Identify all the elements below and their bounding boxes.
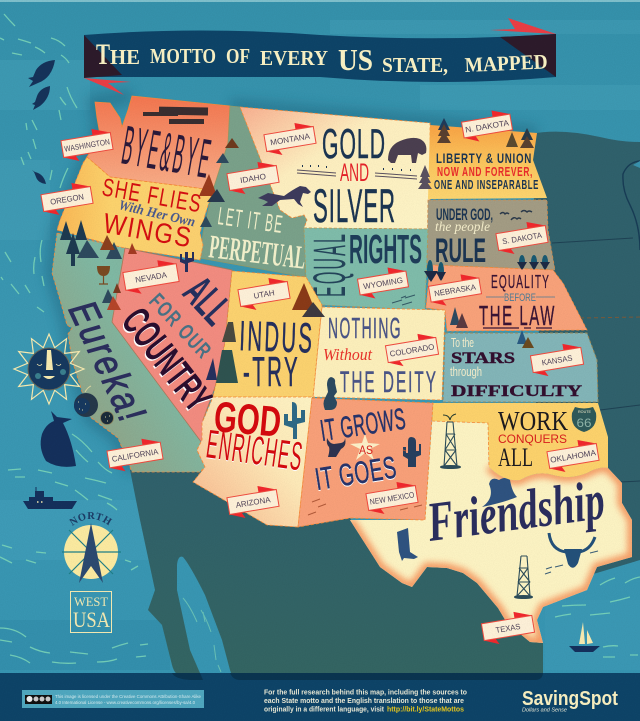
icon: buffalo: [388, 138, 426, 163]
title text: HE: [110, 45, 140, 69]
label: Utah: UTAH: [253, 288, 275, 301]
motto: She flies with her own wings: With Her Own: [117, 198, 197, 230]
motto: God enriches: [204, 393, 306, 480]
motto: Equality before the law: [479, 272, 556, 331]
label: Nevada: [122, 257, 180, 296]
motto: Gold and silver: [297, 120, 417, 232]
licence box: This image is licensed under the Creative Commons Attribution-Share Alike: [55, 694, 201, 700]
motto: Industry: -TRY: [243, 348, 300, 395]
icon: horse: [258, 186, 311, 207]
motto: She flies with her own wings: SHE FLIES: [100, 173, 204, 218]
motto: Gold and silver: GOLD: [322, 120, 386, 167]
infographic: PERPETUAL: [207, 229, 308, 277]
label: Oregon: OREGON: [50, 192, 85, 207]
motto: She flies with her own wings: [100, 173, 204, 254]
motto: Work conquers all: ALL: [498, 443, 533, 472]
motto: Equality before the law: EQUALITY: [491, 272, 550, 292]
infographic: BYE&BYE: [118, 114, 217, 190]
motto: It grows as it goes: IT GROWS: [318, 403, 408, 448]
motto: Liberty and union: [434, 150, 539, 192]
label: Wyoming: WYOMING: [363, 276, 404, 291]
motto: All for our country: COUNTRY: [113, 300, 220, 420]
label: Montana: MONTANA: [270, 132, 311, 147]
icon: trees Nebraska border: [427, 255, 548, 280]
icon: mountains Utah: [292, 283, 325, 317]
icon: compass: [62, 512, 121, 583]
motto: It grows as it goes: IT GOES: [313, 450, 399, 497]
icon: mountains Oregon and California: [77, 235, 137, 310]
motto: To the stars through difficulty: STARS: [451, 350, 515, 367]
motto: Nothing without the deity: NOTHING: [328, 313, 402, 345]
logo: SavingSpot: Dollars and Sense: [522, 708, 567, 714]
icon: sun: [14, 334, 84, 404]
panel: Nebraska: [426, 265, 587, 331]
licence box: [22, 690, 204, 708]
motto: To the stars through difficulty: through: [450, 364, 482, 379]
icon: mountains Idaho: [199, 138, 239, 227]
label: Kansas: [529, 341, 585, 379]
panel: Utah: INDUS: [239, 312, 315, 362]
icon: cowboy boot: [397, 528, 418, 561]
motto: To the stars through difficulty: To the: [451, 335, 474, 350]
title text: US: [338, 42, 373, 77]
infographic: ENRICHES: [204, 422, 306, 479]
panel: Kansas: [443, 333, 598, 402]
label: Oklahoma: [546, 437, 600, 474]
title text: T: [96, 38, 110, 71]
panel: South Dakota: [427, 200, 555, 270]
label: North Dakota: [460, 108, 513, 144]
research note: each State motto and the English translation to those that are: [264, 696, 465, 705]
motto: Under God the people rule: RULE: [435, 232, 486, 270]
label: Nebraska: [427, 271, 482, 308]
title text: MOTTO: [150, 44, 216, 68]
panel: Arizona: [193, 393, 312, 527]
label: California: [106, 436, 164, 474]
landmass: eastern United States: [530, 132, 640, 575]
motto: Equality before the law: BEFORE: [504, 292, 536, 304]
stamp: West USA: WEST: [74, 594, 108, 609]
icon: oil derrick: [514, 556, 532, 598]
infographic: ENRICHES: [204, 423, 306, 480]
landmass: Mexico: [130, 470, 543, 680]
motto: Nothing without the deity: Without: [323, 345, 373, 364]
panel: Wyoming: RIGHTS: [349, 226, 422, 272]
panel: New Mexico: [298, 398, 433, 527]
banner: title: [84, 18, 556, 95]
label: Montana: [263, 120, 317, 157]
motto: Let it be perpetual: [207, 202, 308, 277]
labels: state ribbons: [40, 108, 600, 647]
label: Idaho: IDAHO: [240, 172, 267, 185]
motto: It grows as it goes: [313, 403, 408, 498]
stamp: West USA: [70, 592, 112, 632]
label: California: CALIFORNIA: [111, 447, 160, 464]
motto: Under God the people rule: [435, 205, 493, 270]
panel: Washington: [87, 96, 230, 190]
label: Nevada: NEVADA: [135, 270, 168, 285]
label: Colorado: COLORADO: [389, 342, 435, 359]
motto: God enriches: GOD: [212, 393, 283, 447]
motto: Liberty and union: NOW AND FOREVER,: [437, 164, 533, 179]
label: South Dakota: [495, 219, 549, 256]
motto: Industry: [239, 312, 315, 395]
licence box: 4.0 International License - www.creativecommons.org/licenses/by-sa/4.0: [55, 700, 195, 706]
research note: http://bit.ly/StateMottos: [387, 704, 464, 714]
label: Texas: TEXAS: [495, 622, 521, 635]
label: Wyoming: [356, 265, 409, 301]
stamp: West USA: USA: [73, 607, 110, 632]
motto: Gold and silver: SILVER: [313, 179, 396, 232]
motto: She flies with her own wings: WINGS: [101, 207, 195, 254]
label: New Mexico: NEW MEXICO: [369, 490, 415, 507]
motto: To the stars through difficulty: DIFFICULTY: [451, 383, 583, 400]
footer: [0, 672, 640, 721]
label: Arizona: [226, 483, 280, 520]
title text: OF: [226, 44, 250, 68]
title text: MAPPED: [464, 49, 548, 77]
panel: Colorado: [313, 307, 445, 400]
motto: All for our country: [112, 267, 241, 422]
research note: [264, 688, 467, 714]
icon: logs: [143, 107, 208, 124]
panel: Nevada: [112, 248, 241, 443]
icon: cactus: [403, 437, 421, 467]
motto: Work conquers all: CONQUERS: [498, 432, 567, 446]
panel: Oklahoma: [432, 403, 608, 480]
motto: Equal rights: [304, 226, 422, 297]
icon: oranges: [74, 386, 114, 424]
icon: mountains Kansas: [517, 330, 534, 348]
icon: sailboat: [569, 622, 600, 652]
icon: cactus Nevada border: [180, 252, 194, 272]
motto: Liberty and union: LIBERTY & UNION: [436, 150, 532, 166]
icon: route 66 shield: [572, 407, 596, 432]
icon: oil derrick Oklahoma border: [440, 414, 460, 468]
logo: SavingSpot: SavingSpot: [522, 688, 618, 710]
panel: Texas: [350, 421, 632, 643]
icon: ship: [23, 487, 77, 509]
label: New Mexico: [365, 479, 419, 516]
icon: mountains Nebraska: [450, 307, 468, 328]
icon: wine glass: [97, 266, 110, 284]
motto: All for our country: COUNTRY: [112, 301, 219, 422]
motto: Under God the people rule: the people: [435, 220, 490, 235]
icon: fir trees Oregon: [60, 220, 87, 266]
label: Washington: [60, 126, 114, 163]
label: Kansas: KANSAS: [541, 353, 573, 367]
motto: All for our country: ALL: [174, 267, 241, 334]
infographic: EQUAL: [304, 232, 355, 297]
motto: Equality before the law: THE LAW: [479, 300, 556, 331]
motto: All for our country: FOR OUR: [144, 288, 217, 364]
panel: Montana: [240, 107, 430, 232]
icon: route 66 shield: ROUTE: [578, 410, 592, 414]
label: South Dakota: S. DAKOTA: [502, 231, 543, 246]
motto: Gold and silver: AND: [340, 159, 369, 187]
motto: Work conquers all: WORK: [498, 406, 568, 436]
icon: longhorn steer: [549, 533, 595, 568]
panel: Utah: [213, 271, 322, 397]
icon: cactus: [284, 402, 305, 439]
label: Oklahoma: OKLAHOMA: [550, 448, 597, 465]
label: Colorado: [384, 331, 440, 369]
title text: [96, 38, 548, 77]
label: Washington: WASHINGTON: [64, 137, 111, 154]
label: Idaho: [226, 159, 280, 196]
label: North Dakota: N. DAKOTA: [465, 118, 510, 135]
label: Arizona: ARIZONA: [235, 495, 272, 510]
icon: tree bases Nebraska border: [424, 262, 550, 282]
icon: cactus Colorado border: [324, 377, 337, 410]
icon: whale: [41, 411, 76, 467]
icon: birds: [500, 210, 532, 220]
icon: cowboy hat: [482, 478, 517, 507]
label: Oregon: [40, 180, 94, 217]
icon: bull skull: [327, 438, 346, 457]
motto: Nothing without the deity: THE DEITY: [340, 366, 438, 399]
research note: originally in a different language, visit: [264, 704, 384, 714]
motto: Eureka: Eureka!: [60, 294, 155, 431]
label: Texas: [480, 609, 536, 647]
motto: Work conquers all: [498, 406, 568, 472]
icon: fish: [28, 60, 55, 184]
motto: Let it be perpetual: LET IT BE: [216, 202, 285, 239]
icon: hills Utah and Nevada: [206, 322, 238, 383]
title text: STATE,: [382, 53, 448, 77]
research note: For the full research behind this map, including the sources to: [264, 688, 467, 696]
panel: California: [52, 233, 205, 472]
panel: North Dakota: [428, 125, 547, 199]
icon: fir tree Montana: [418, 165, 432, 189]
icon: trees North Dakota: [437, 118, 534, 148]
motto: Under God the people rule: UNDER GOD,: [436, 205, 493, 224]
title text: EVERY: [260, 46, 328, 70]
label: Utah: [237, 275, 291, 312]
icons: trees and mountains crossing borders: [60, 118, 550, 468]
panel: Wyoming: [304, 226, 428, 310]
compass north label: NORTH: [68, 512, 112, 526]
motto: It grows as it goes: IT GOES: [313, 451, 399, 498]
motto: Liberty and union: ONE AND INSEPARABLE: [434, 177, 539, 192]
motto: To the stars through difficulty: [450, 335, 583, 400]
panel: Idaho: [200, 106, 308, 277]
icon: route 66 shield: 66: [576, 416, 592, 430]
motto: It grows as it goes: AS: [359, 443, 373, 457]
panel: Oregon: [57, 157, 213, 260]
motto: Nothing without the deity: [323, 313, 438, 399]
label: Nebraska: NEBRASKA: [434, 282, 477, 298]
